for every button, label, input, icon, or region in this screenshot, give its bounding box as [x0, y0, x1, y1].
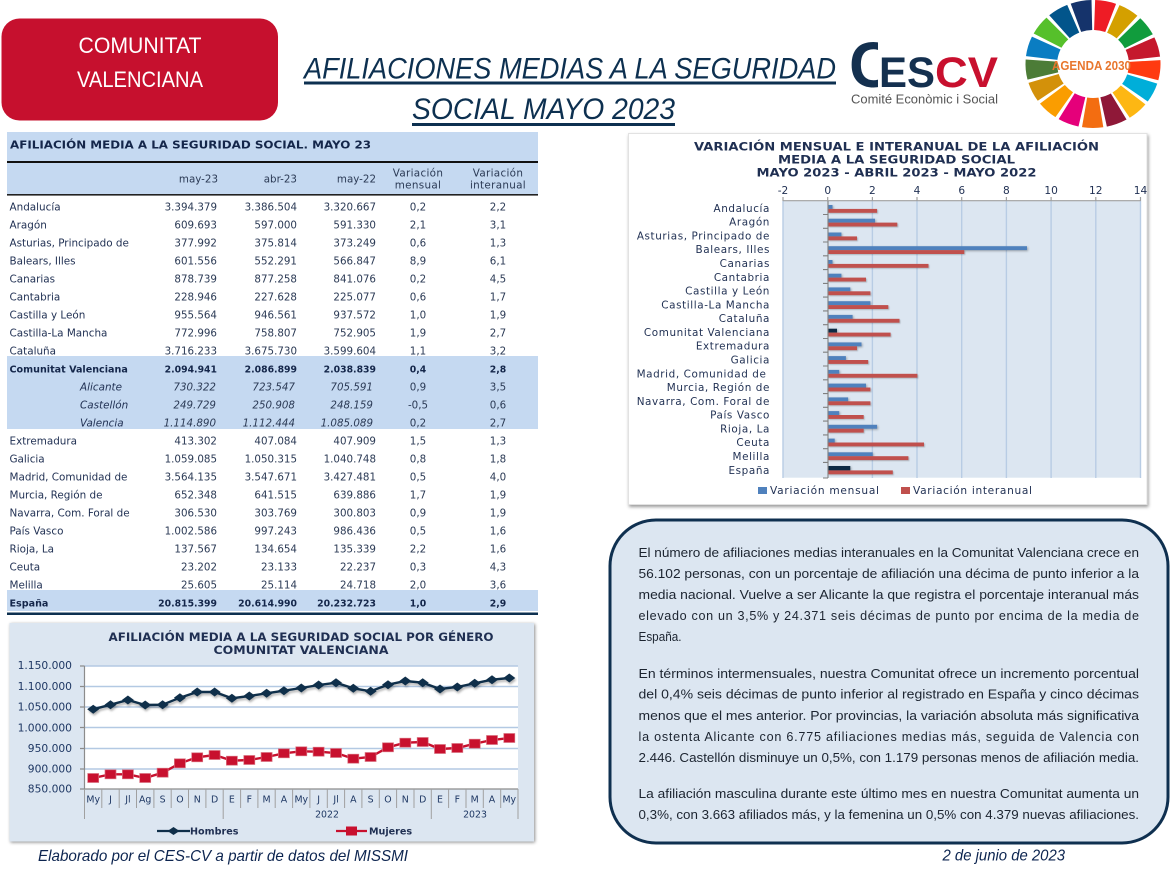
x axis: S: [160, 794, 166, 806]
row: Cantabria: 227.628: [254, 292, 297, 304]
x axis: J: [316, 794, 320, 806]
row: País Vasco: País Vasco: [10, 526, 63, 538]
row: Cantabria: 225.077: [333, 292, 376, 304]
row: Navarra: 0,9: [410, 508, 426, 520]
row: Cataluña: 3.675.730: [245, 346, 297, 358]
highlight band: Comunitat Valenciana: [7, 356, 538, 429]
logo: CES-CV: [849, 29, 999, 106]
logo: CES-CV: Comité Econòmic i Social: [851, 92, 998, 106]
panel: commentary text: [610, 520, 1168, 843]
category labels: Comunitat Valenciana: [644, 327, 770, 339]
paragraph 3: 0,3%, con 3.663 afiliados más, y la femenina un 0,5% con 4.379 nuevas afiliaciones.: [638, 808, 1139, 822]
row: Canarias: Canarias: [10, 274, 55, 286]
top axis labels: 12: [1089, 185, 1103, 197]
x axis: A: [489, 794, 496, 806]
row: Castilla y León: 937.572: [333, 310, 376, 322]
row: Melilla: 25.114: [261, 580, 297, 592]
x axis: Jl: [332, 794, 339, 806]
row: Comunitat Valenciana: 2.086.899: [245, 364, 297, 376]
plot area: [80, 666, 518, 789]
x axis: My: [86, 794, 100, 806]
legend: [157, 826, 412, 838]
row: Rioja: 1,6: [490, 544, 506, 556]
logo: CES-CV: C: [849, 29, 895, 101]
row: Extremadura: 413.302: [174, 436, 217, 448]
row: Extremadura: 407.909: [333, 436, 376, 448]
paragraph 2: la ostenta Alicante con 6.775 afiliaciones medias más, seguida de Valencia con: [638, 730, 1139, 744]
category labels: Asturias, Principado de: [637, 230, 770, 242]
series: Variación interanual: [828, 209, 964, 474]
row: Aragón: 609.693: [174, 220, 217, 232]
bar chart title: MAYO 2023 - ABRIL 2023 - MAYO 2022: [756, 166, 1036, 180]
row: Balears: 552.291: [254, 256, 297, 268]
legend: Mujeres: [369, 826, 412, 838]
row: Andalucía: 2,2: [490, 202, 506, 214]
x axis: O: [176, 794, 184, 806]
row: España: 20.232.723: [317, 598, 376, 610]
x axis: N: [194, 794, 201, 806]
row: Castilla y León: Castilla y León: [10, 310, 85, 322]
bar chart title: MEDIA A LA SEGURIDAD SOCIAL: [778, 152, 1016, 166]
row: Castellón: 248.159: [330, 400, 373, 412]
row: Ceuta: 4,3: [490, 562, 506, 574]
series: Mujeres: [93, 738, 509, 778]
row: Cantabria: 0,6: [410, 292, 426, 304]
x axis: A: [281, 794, 288, 806]
top axis labels: 4: [914, 185, 921, 197]
row: Canarias: 4,5: [490, 274, 506, 286]
panel: bar chart: [628, 134, 1147, 504]
category labels: Galicia: [731, 354, 770, 366]
row: Valencia: 1.112.444: [243, 418, 295, 430]
x axis: M: [471, 794, 479, 806]
row: Rioja: 137.567: [174, 544, 217, 556]
row: Balears: Balears, Illes: [10, 256, 76, 268]
row: Valencia: 2,7: [490, 418, 506, 430]
row: País Vasco: 0,5: [410, 526, 426, 538]
row: Navarra: 303.769: [254, 508, 297, 520]
row: Rioja: 135.339: [333, 544, 376, 556]
table header: Variación: [393, 168, 443, 180]
row: España: 2,9: [490, 598, 506, 610]
row: Aragón: 597.000: [254, 220, 297, 232]
row: Canarias: 878.739: [174, 274, 217, 286]
row: Cataluña: 3.716.233: [165, 346, 217, 358]
row: Melilla: 3,6: [490, 580, 506, 592]
category labels: Navarra, Com. Foral de: [637, 396, 770, 408]
row: Alicante: 705.591: [330, 382, 373, 394]
row: Castilla y León: 1,0: [410, 310, 426, 322]
row: Melilla: 25.605: [181, 580, 217, 592]
row: Navarra: 300.803: [333, 508, 376, 520]
row: Melilla: 24.718: [340, 580, 376, 592]
row: Cantabria: Cantabria: [10, 292, 60, 304]
row: Balears: 601.556: [174, 256, 217, 268]
row: Comunitat Valenciana: 2,8: [490, 364, 506, 376]
legend: Variación interanual: [913, 485, 1032, 497]
x axis: F: [247, 794, 252, 806]
row: Galicia: Galicia: [10, 454, 45, 466]
x axis: E: [437, 794, 443, 806]
x axis: My: [294, 794, 309, 806]
row: Andalucía: [10, 202, 506, 214]
row: Castellón: 0,6: [490, 400, 506, 412]
row: España: 20.815.399: [158, 598, 217, 610]
row: Balears: 6,1: [490, 256, 506, 268]
legend: Hombres: [190, 826, 239, 838]
row: Castilla-La Mancha: 2,7: [490, 328, 506, 340]
table header: may-22: [337, 174, 376, 186]
row: Galicia: 1.059.085: [165, 454, 217, 466]
top axis labels: 10: [1044, 185, 1058, 197]
row: Murcia: 652.348: [174, 490, 217, 502]
line chart title: COMUNITAT VALENCIANA: [214, 644, 389, 657]
row: Extremadura: Extremadura: [10, 436, 77, 448]
category labels: Murcia, Región de: [667, 382, 770, 394]
legend: Variación mensual: [770, 485, 879, 497]
paragraph 2: menos que el mes anterior. Por provincias, la variación absoluta más significativa: [638, 709, 1139, 723]
row: Aragón: Aragón: [10, 220, 47, 232]
x axis: Jl: [124, 794, 131, 806]
x axis: My: [502, 794, 517, 806]
row: Alicante: 3,5: [490, 382, 506, 394]
row: Madrid: 3.547.671: [245, 472, 297, 484]
row: Cataluña: 3.599.604: [324, 346, 376, 358]
row: Aragón: [10, 220, 506, 232]
row: Melilla: Melilla: [10, 580, 43, 592]
row: Balears: 8,9: [410, 256, 426, 268]
row: Ceuta: Ceuta: [10, 562, 40, 574]
paragraph 1: [638, 546, 1139, 644]
row: Rioja: [10, 544, 506, 556]
icon: Agenda 2030 wheel: [1020, 0, 1166, 133]
row: Castilla y León: 955.564: [174, 310, 217, 322]
row: Cantabria: [10, 292, 506, 304]
top axis labels: 8: [1003, 185, 1010, 197]
row: Castilla y León: 1,9: [490, 310, 506, 322]
row: Madrid: Madrid, Comunidad de: [10, 472, 127, 484]
category labels: [637, 203, 770, 477]
row: Aragón: 3,1: [490, 220, 506, 232]
row: Comunitat Valenciana: Comunitat Valenciana: [10, 364, 128, 376]
y axis labels: 950.000: [28, 742, 72, 755]
row: Galicia: 1.050.315: [245, 454, 297, 466]
row: Castellón: [80, 400, 506, 412]
row: Rioja: Rioja, La: [10, 544, 54, 556]
row: Murcia: 1,7: [410, 490, 426, 502]
line chart title: [108, 631, 493, 657]
row: Castellón: 250.908: [252, 400, 295, 412]
category labels: País Vasco: [710, 410, 770, 422]
row: Aragón: 591.330: [333, 220, 376, 232]
x axis: O: [384, 794, 392, 806]
paragraph 1: elevado con un 3,5% y 24.371 seis décimas de punto por encima de la media de: [638, 609, 1139, 623]
row: Navarra: Navarra, Com. Foral de: [10, 508, 130, 520]
row: Andalucía: 0,2: [410, 202, 426, 214]
row: Madrid: 3.427.481: [324, 472, 376, 484]
zero axis: [823, 201, 828, 478]
line chart title: AFILIACIÓN MEDIA A LA SEGURIDAD SOCIAL POR GÉNERO: [108, 631, 493, 644]
row: Andalucía: 3.320.667: [324, 202, 376, 214]
row: Galicia: 0,8: [410, 454, 426, 466]
plot area: [783, 197, 1140, 478]
row: Asturias: 0,6: [410, 238, 426, 250]
category labels: Aragón: [729, 217, 770, 229]
row: Castilla-La Mancha: 772.996: [174, 328, 217, 340]
row: Castilla y León: 946.561: [254, 310, 297, 322]
category labels: Castilla y León: [685, 286, 770, 298]
row: Navarra: [10, 508, 506, 520]
row: España: España: [10, 598, 48, 610]
paragraph 3: [638, 787, 1139, 822]
row: País Vasco: 997.243: [254, 526, 297, 538]
badge: Comunitat Valenciana: COMUNITAT: [78, 33, 202, 58]
row: Castilla-La Mancha: 1,9: [410, 328, 426, 340]
row: Castilla y León: [10, 310, 506, 322]
series: Hombres: [93, 678, 509, 709]
row: Castellón: -0,5: [408, 400, 428, 412]
row: Comunitat Valenciana: 0,4: [410, 364, 427, 376]
row: Asturias: 1,3: [490, 238, 506, 250]
x axis: D: [419, 794, 426, 806]
row: Galicia: 1,8: [490, 454, 506, 466]
row: Canarias: [10, 274, 506, 286]
panel: line chart by gender: [10, 623, 534, 842]
category labels: Extremadura: [696, 341, 770, 353]
row: País Vasco: [10, 526, 506, 538]
category labels: Madrid, Comunidad de: [637, 368, 766, 380]
row: Cataluña: [10, 346, 506, 358]
row: Andalucía: 3.386.504: [245, 202, 297, 214]
icon: Agenda 2030 wheel: AGENDA 2030: [1052, 59, 1131, 73]
paragraph 1: 56.102 personas, con un porcentaje de afiliación una décima de punto inferior a la: [638, 567, 1139, 581]
row: Alicante: 723.547: [252, 382, 295, 394]
row: Canarias: 877.258: [254, 274, 297, 286]
badge: Comunitat Valenciana: VALENCIANA: [77, 67, 203, 92]
table header: mensual: [395, 180, 441, 192]
x axis: [84, 789, 518, 820]
y axis labels: 1.100.000: [18, 680, 72, 693]
row: Navarra: 1,9: [490, 508, 506, 520]
row: Galicia: 1.040.748: [324, 454, 376, 466]
x axis: A: [350, 794, 357, 806]
top axis labels: -2: [778, 185, 788, 197]
row: España: 20.614.990: [238, 598, 298, 610]
row: Ceuta: 22.237: [340, 562, 376, 574]
row: Castilla-La Mancha: Castilla-La Mancha: [10, 328, 107, 340]
bar chart title: VARIACIÓN MENSUAL E INTERANUAL DE LA AFILIACIÓN: [694, 138, 1099, 154]
x axis: E: [229, 794, 235, 806]
row: Comunitat Valenciana: [10, 364, 506, 376]
x axis: J: [108, 794, 112, 806]
y axis labels: 850.000: [28, 782, 72, 796]
paragraph 2: 2.446. Castellón disminuye un 0,5%, con 1.179 personas menos de afiliación media.: [638, 751, 1139, 765]
row: Andalucía: Andalucía: [10, 202, 61, 214]
badge: Comunitat Valenciana: [2, 18, 278, 120]
row: País Vasco: 986.436: [333, 526, 376, 538]
row: Ceuta: 23.202: [181, 562, 217, 574]
row: Valencia: 0,2: [410, 418, 426, 430]
row: Castellón: Castellón: [80, 400, 128, 412]
row: Ceuta: [10, 562, 506, 574]
row: Alicante: [79, 382, 506, 394]
table bottom rule: [7, 612, 538, 615]
row: Extremadura: [10, 436, 506, 448]
row: Alicante: Alicante: [79, 382, 122, 394]
row: Cataluña: 3,2: [490, 346, 506, 358]
paragraph 1: El número de afiliaciones medias interanuales en la Comunitat Valenciana crece en: [638, 546, 1139, 560]
top axis labels: 6: [958, 185, 965, 197]
row: Murcia: 641.515: [254, 490, 297, 502]
top axis labels: [778, 185, 1147, 197]
top axis labels: 14: [1134, 185, 1147, 197]
category labels: Balears, Illes: [696, 244, 770, 256]
row: Asturias: Asturias, Principado de: [10, 238, 129, 250]
row: Valencia: 1.085.089: [321, 418, 373, 430]
top axis labels: 0: [824, 185, 831, 197]
row: Rioja: 2,2: [410, 544, 426, 556]
row: Madrid: 4,0: [490, 472, 506, 484]
paragraph 2: [638, 667, 1139, 765]
table header: may-23: [179, 174, 218, 186]
title: AFILIACIONES MEDIAS A LA SEGURIDAD: [302, 52, 836, 86]
row: Castilla-La Mancha: 752.905: [333, 328, 376, 340]
y axis labels: 1.000.000: [18, 722, 72, 734]
x axis: N: [402, 794, 409, 806]
row: Cantabria: 1,7: [490, 292, 506, 304]
row: España: [10, 598, 506, 610]
table header: interanual: [470, 180, 526, 192]
row: Murcia: 1,9: [490, 490, 506, 502]
paragraph 2: del 0,4% seis décimas de punto inferior al registrado en España y cinco décimas: [638, 688, 1139, 702]
row: Extremadura: 1,3: [490, 436, 506, 448]
logo: CES-CV: CV: [935, 50, 999, 97]
category labels: Castilla-La Mancha: [661, 299, 770, 311]
row: Alicante: 0,9: [410, 382, 426, 394]
row: Canarias: 841.076: [333, 274, 376, 286]
row: Ceuta: 0,3: [410, 562, 426, 574]
x axis: D: [211, 794, 218, 806]
row: Galicia: [10, 454, 506, 466]
highlight band: España: [7, 590, 538, 611]
top axis labels: 2: [869, 185, 876, 197]
row: Extremadura: 407.084: [254, 436, 297, 448]
footer: date: 2 de junio de 2023: [942, 848, 1065, 864]
row: Murcia: 639.886: [333, 490, 376, 502]
x axis: S: [368, 794, 374, 806]
table header: Variación: [473, 168, 523, 180]
row: Valencia: [80, 418, 506, 430]
bar chart title: [694, 138, 1099, 180]
y axis labels: 1.150.000: [18, 659, 72, 672]
row: Asturias: [10, 238, 506, 250]
table header: abr-23: [264, 174, 297, 186]
row: Murcia: Murcia, Región de: [10, 490, 103, 502]
y axis labels: [18, 659, 72, 796]
row: Asturias: 375.814: [254, 238, 297, 250]
x axis: Ag: [139, 794, 151, 806]
category labels: Ceuta: [736, 437, 770, 449]
title: [302, 52, 836, 126]
paragraph 3: La afiliación masculina durante este último mes en nuestra Comunitat aumenta un: [638, 787, 1139, 801]
row: Asturias: 373.249: [333, 238, 376, 250]
row: Madrid: [10, 472, 506, 484]
logo: CES-CV: ES: [879, 50, 935, 97]
row: Castilla-La Mancha: [10, 328, 506, 340]
row: Alicante: 730.322: [173, 382, 216, 394]
row: Valencia: 1.114.890: [164, 418, 216, 430]
row: País Vasco: 1,6: [490, 526, 506, 538]
row: Madrid: 0,5: [410, 472, 426, 484]
panel: table: [7, 132, 538, 615]
row: Melilla: 2,0: [410, 580, 426, 592]
series: Variación mensual: [828, 205, 1027, 470]
row: Navarra: 306.530: [174, 508, 217, 520]
row: País Vasco: 1.002.586: [165, 526, 217, 538]
row: Valencia: Valencia: [80, 418, 124, 430]
paragraph 1: España.: [638, 630, 682, 644]
row: Balears: 566.847: [333, 256, 376, 268]
category labels: Cataluña: [719, 313, 770, 325]
y axis labels: 1.050.000: [18, 700, 72, 714]
footer: source: Elaborado por el CES-CV a partir de datos del MISSMI: [38, 848, 409, 865]
title: SOCIAL MAYO 2023: [412, 93, 675, 126]
paragraph 2: En términos intermensuales, nuestra Comunitat ofrece un incremento porcentual: [638, 667, 1139, 681]
row: Castellón: 249.729: [173, 400, 216, 412]
row: Extremadura: 1,5: [410, 436, 426, 448]
category labels: España: [728, 465, 770, 477]
row: Cataluña: Cataluña: [10, 346, 56, 358]
category labels: Melilla: [733, 451, 770, 463]
table header: AFILIACIÓN MEDIA A LA SEGURIDAD SOCIAL. MAYO 23: [10, 138, 371, 152]
row: Aragón: 2,1: [410, 220, 426, 232]
x axis: 2023: [463, 810, 487, 820]
paragraph 1: media nacional. Vuelve a ser Alicante la que registra el porcentaje interanual más: [638, 588, 1139, 602]
category labels: Rioja, La: [720, 423, 770, 435]
row: Madrid: 3.564.135: [165, 472, 217, 484]
row: Ceuta: 23.133: [261, 562, 297, 574]
row: Canarias: 0,2: [410, 274, 426, 286]
row: Comunitat Valenciana: 2.038.839: [324, 364, 376, 376]
row: Balears: [10, 256, 506, 268]
y axis labels: 900.000: [28, 762, 72, 776]
row: Cataluña: 1,1: [410, 346, 426, 358]
category labels: Andalucía: [714, 203, 770, 215]
category labels: Cantabria: [714, 272, 770, 284]
row: Castilla-La Mancha: 758.807: [254, 328, 297, 340]
row: España: 1,0: [410, 598, 427, 610]
row: Comunitat Valenciana: 2.094.941: [165, 364, 217, 376]
row: Murcia: [10, 490, 506, 502]
row: Asturias: 377.992: [174, 238, 217, 250]
legend: [758, 485, 1032, 497]
category labels: Canarias: [720, 258, 770, 270]
row: Cantabria: 228.946: [174, 292, 217, 304]
table header: [7, 132, 538, 196]
row: Melilla: [10, 580, 506, 592]
x axis: 2022: [315, 810, 339, 820]
row: Rioja: 134.654: [254, 544, 297, 556]
x axis: F: [455, 794, 460, 806]
x axis: M: [263, 794, 271, 806]
row: Andalucía: 3.394.379: [165, 202, 217, 214]
